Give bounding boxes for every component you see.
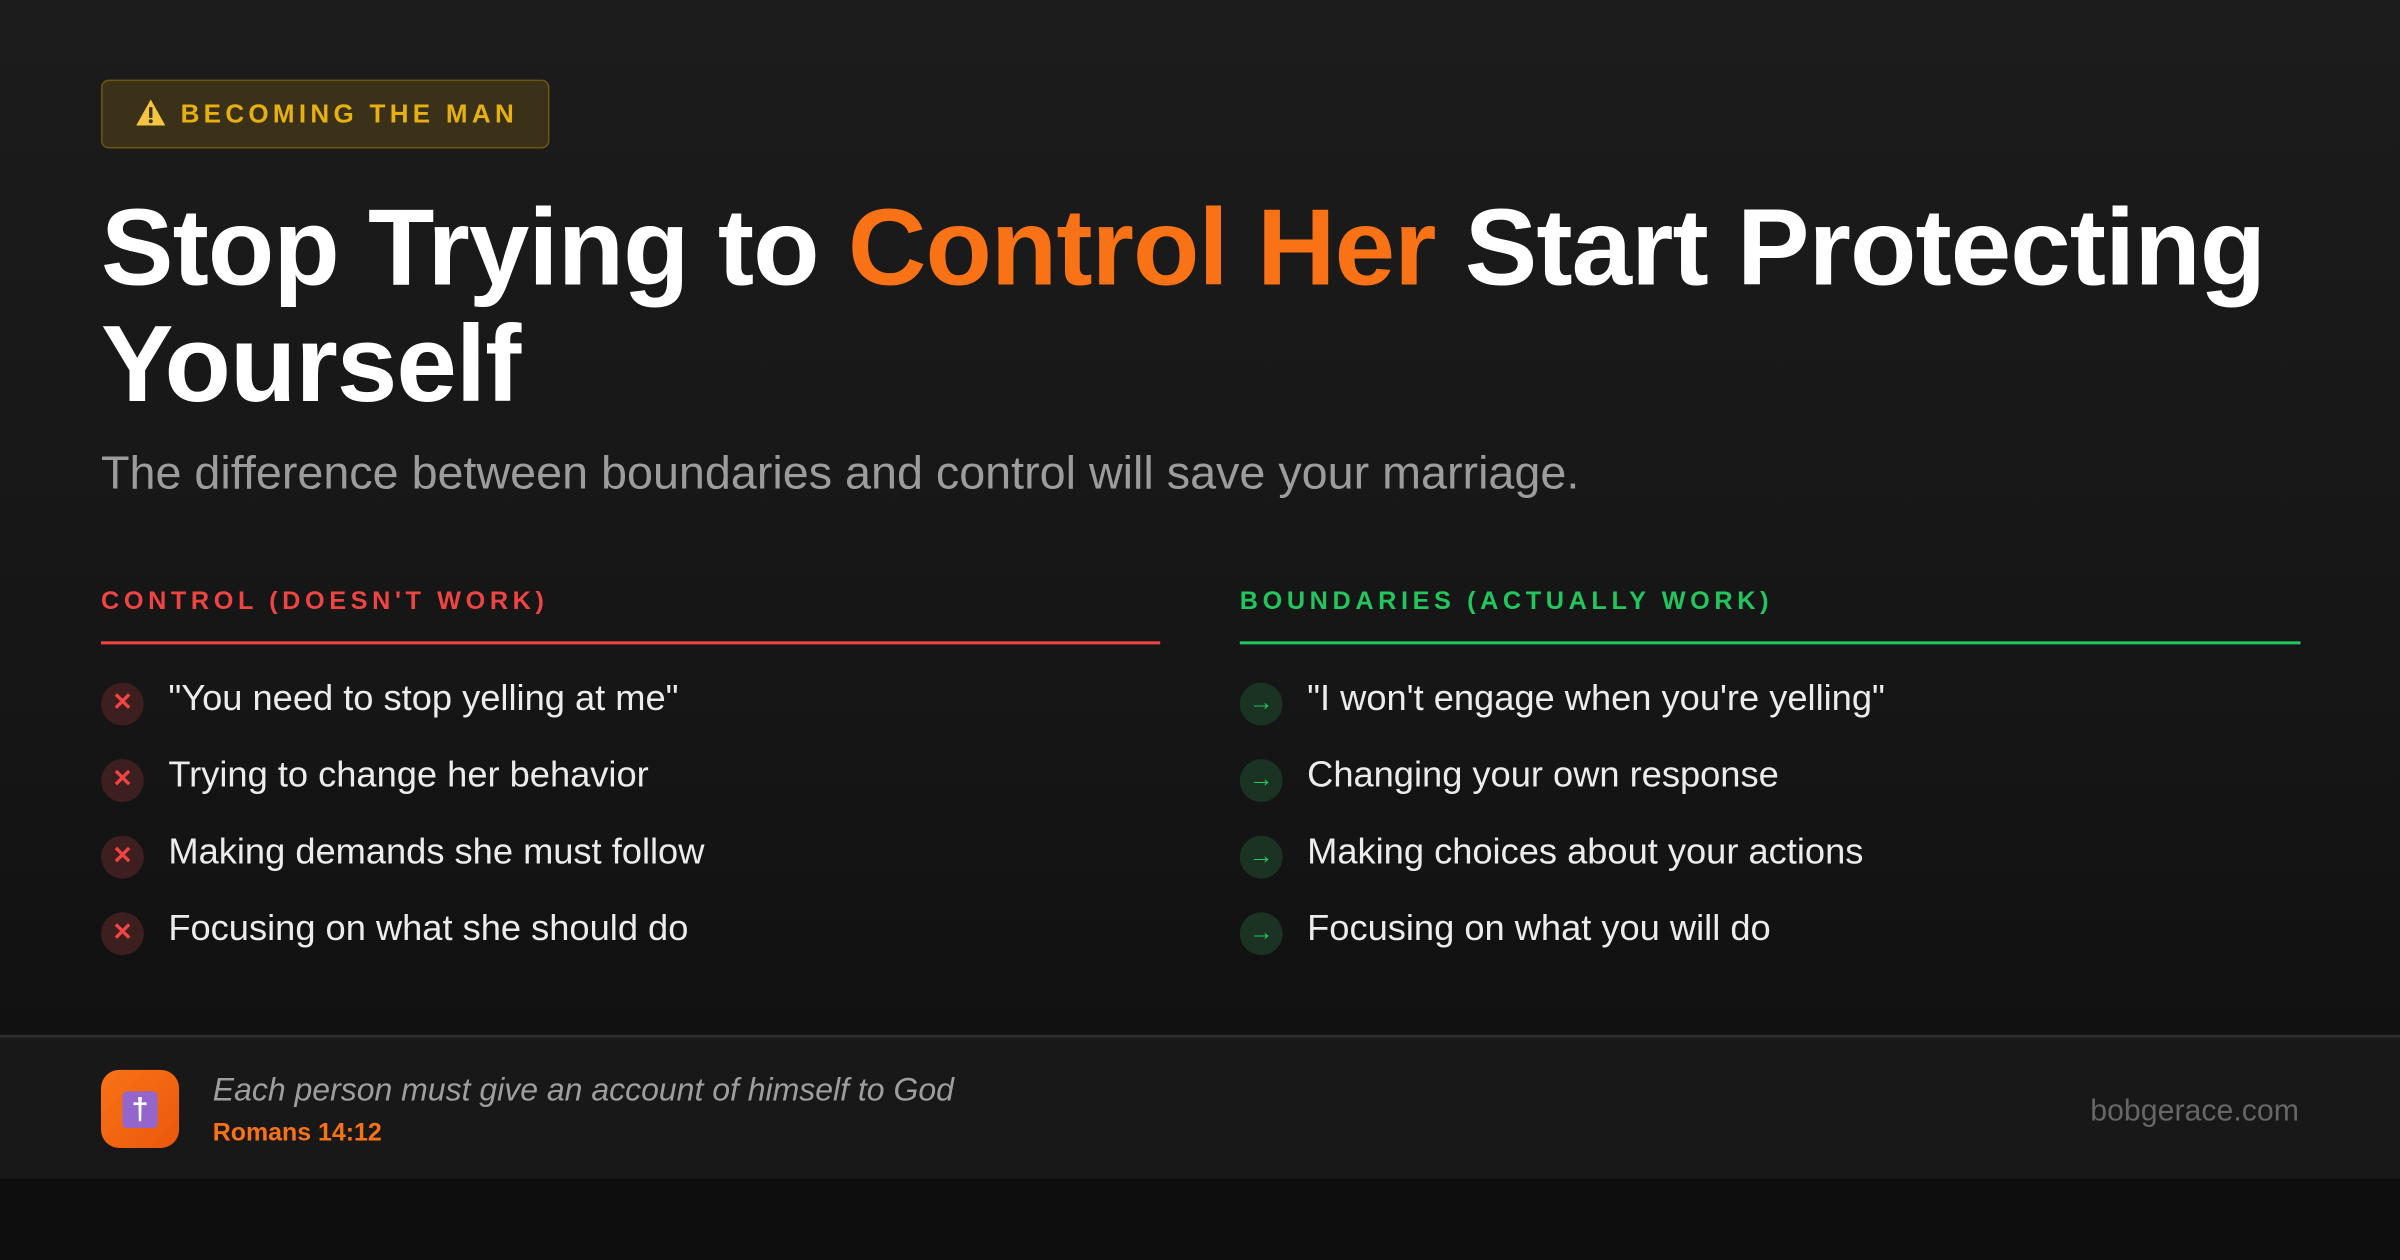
list: control items: Focusing on what she should do: [168, 909, 688, 949]
icon: cross: [101, 1070, 179, 1148]
quote: Each person must give an account of himself to God: [213, 1073, 954, 1108]
site url: bobgerace.com: [2090, 1094, 2299, 1128]
list: control items: Making demands she must follow: [168, 833, 704, 872]
list: control items: ✕: [112, 843, 133, 869]
title: Stop Trying to Control Her Start Protecting Yourself: [101, 188, 2265, 426]
list: control items: ✕: [112, 920, 133, 946]
heading: control: CONTROL (DOESN'T WORK): [101, 588, 549, 615]
list: control items: "You need to stop yelling at me": [168, 680, 679, 719]
badge: BECOMING THE MAN: [181, 99, 518, 129]
list: boundary items: Focusing on what you will do: [1307, 909, 1771, 949]
list: boundary items: "I won't engage when you're yelling": [1307, 680, 1885, 719]
list: boundary items: →: [1249, 920, 1273, 946]
panel: control: [101, 588, 1160, 955]
icon: cross: †: [132, 1093, 149, 1127]
list: boundary items: →: [1249, 767, 1273, 793]
list: boundary items: →: [1249, 690, 1273, 716]
list: control items: ✕: [112, 767, 133, 793]
list: boundary items: Making choices about your actions: [1307, 833, 1863, 872]
list: control items: Trying to change her behavior: [168, 756, 649, 796]
list: control items: ✕: [112, 690, 133, 716]
list: boundary items: →: [1249, 843, 1273, 869]
heading: boundaries: BOUNDARIES (ACTUALLY WORK): [1240, 588, 1773, 615]
badge: [101, 80, 549, 148]
subtitle: The difference between boundaries and control will save your marriage.: [101, 447, 1579, 499]
panel: boundaries: [1240, 588, 2300, 955]
reference: Romans 14:12: [213, 1119, 382, 1146]
list: boundary items: [1240, 680, 1885, 955]
list: boundary items: Changing your own response: [1307, 756, 1779, 796]
list: control items: [101, 680, 704, 955]
footer: [0, 1035, 2400, 1182]
